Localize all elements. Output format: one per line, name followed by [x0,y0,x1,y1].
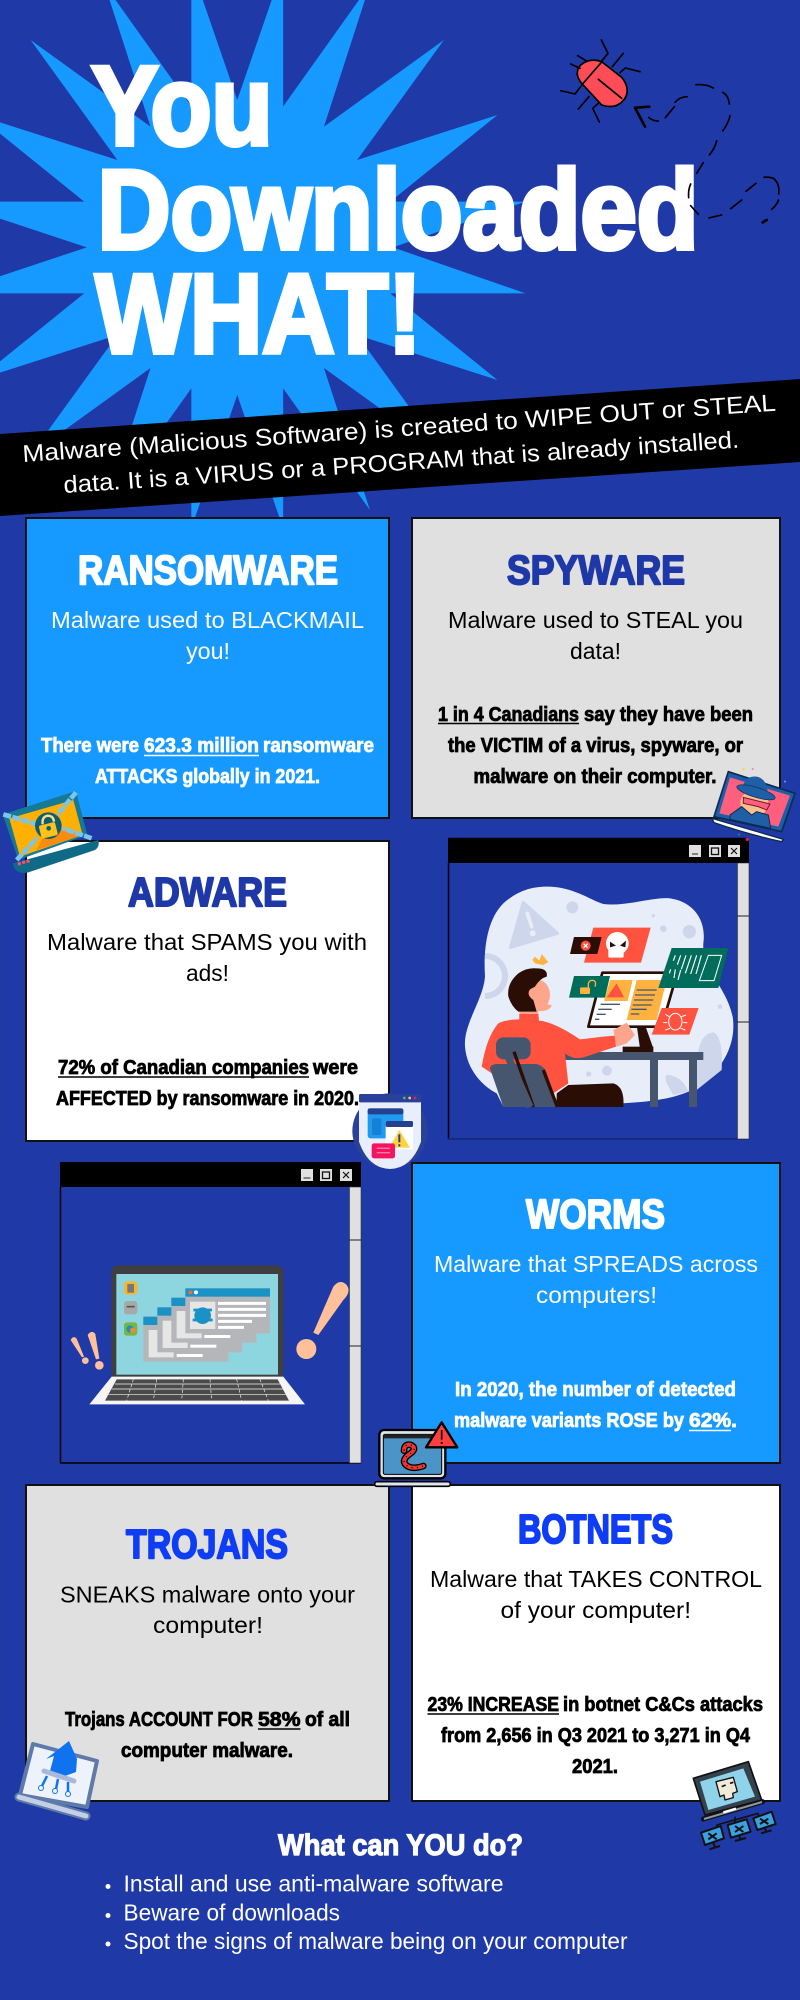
panel: adware: ads! [186,960,229,986]
panel: botnets: Malware that TAKES CONTROL [430,1566,762,1592]
panel: adware [26,841,389,1141]
list: actions to take: Spot the signs of malware being on your computer [124,1928,628,1954]
panel: spyware: malware on their computer. [474,766,716,788]
list: actions to take: Install and use anti-malware software [124,1870,504,1896]
panel: spyware: 1 in 4 Canadians [438,704,579,726]
panel: trojans [26,1485,389,1801]
panel: window with infected laptop [60,1162,361,1463]
panel: spyware: Malware used to STEAL you [448,607,743,633]
title: You [92,44,272,168]
icon: trojan horse laptop [19,1741,97,1816]
illustration: person at computer under attack [465,887,733,1107]
panel: adware: AFFECTED by ransomware in 2020. [56,1088,359,1110]
panel: trojans: 58% [258,1709,301,1731]
panel: botnets: 23% INCREASE [428,1694,559,1716]
panel: adware: 72% of Canadian companies [58,1057,309,1079]
panel: ransomware: There were [41,735,139,757]
heading: what can you do: What can YOU do? [278,1829,523,1862]
panel: window with person at computer [448,838,749,1139]
panel: ransomware: ATTACKS globally in 2021. [95,766,320,788]
panel: worms: Malware that SPREADS across [434,1251,758,1277]
icon: worm on laptop [375,1422,457,1486]
panel: worms: WORMS [526,1191,665,1237]
title: WHAT! [96,252,422,376]
banner: malware definition: data. It is a VIRUS or a PROGRAM that is already installed. [63,427,740,499]
banner: malware definition: Malware (Malicious Software) is created to WIPE OUT or STEAL [22,390,777,468]
panel: ransomware: Malware used to BLACKMAIL [51,607,364,633]
panel: spyware [412,518,780,818]
panel: worms: In 2020, the number of detected [455,1379,736,1401]
title [92,44,698,376]
panel: worms [412,1163,780,1463]
panel: ransomware: you! [186,638,230,664]
icon: botnet laptop [693,1762,776,1849]
title: Downloaded [98,148,698,272]
panel: adware: were [312,1057,358,1079]
icon: locked laptop [3,791,99,873]
icon: adware browser shield [352,1093,428,1169]
panel: spyware: SPYWARE [507,547,685,593]
panel: spyware: data! [570,638,621,664]
icon: red bug [561,40,640,122]
icon: spy laptop [712,768,795,842]
list: actions to take: Beware of downloads [124,1900,340,1926]
starburst background [0,0,526,528]
panel: ransomware: 623.3 million [144,735,259,757]
panel: trojans: computer! [153,1612,263,1638]
panel: ransomware: ransomware [263,735,374,757]
window buttons [301,1169,352,1181]
banner: malware definition [0,379,800,516]
panel: botnets: BOTNETS [518,1506,673,1552]
panel: adware: ADWARE [128,869,287,915]
panel: trojans: TROJANS [126,1521,288,1567]
panel: trojans: computer malware. [121,1740,293,1762]
panel: botnets: 2021. [572,1756,618,1778]
panel: trojans: SNEAKS malware onto your [60,1582,355,1608]
panel: worms: malware variants ROSE by [454,1410,685,1432]
panel: spyware: say they have been [584,704,753,726]
arrow: dashed flight path [635,85,779,222]
illustration: laptop with cascading windows [71,1265,349,1404]
panel: ransomware [26,518,389,818]
panel: trojans: of all [305,1709,350,1731]
window buttons [689,845,740,857]
panel: botnets: in botnet C&Cs attacks [563,1694,763,1716]
list: actions to take [106,1870,628,1954]
panel: ransomware: RANSOMWARE [78,547,338,593]
panel: botnets [412,1485,780,1801]
panel: spyware: the VICTIM of a virus, spyware, or [448,735,743,757]
panel: adware: Malware that SPAMS you with [47,929,367,955]
panel: worms: computers! [536,1282,657,1308]
panel: worms: 62%. [689,1410,737,1432]
panel: botnets: from 2,656 in Q3 2021 to 3,271 in Q4 [441,1725,751,1747]
panel: botnets: of your computer! [500,1597,691,1623]
panel: trojans: Trojans ACCOUNT FOR [65,1709,253,1731]
